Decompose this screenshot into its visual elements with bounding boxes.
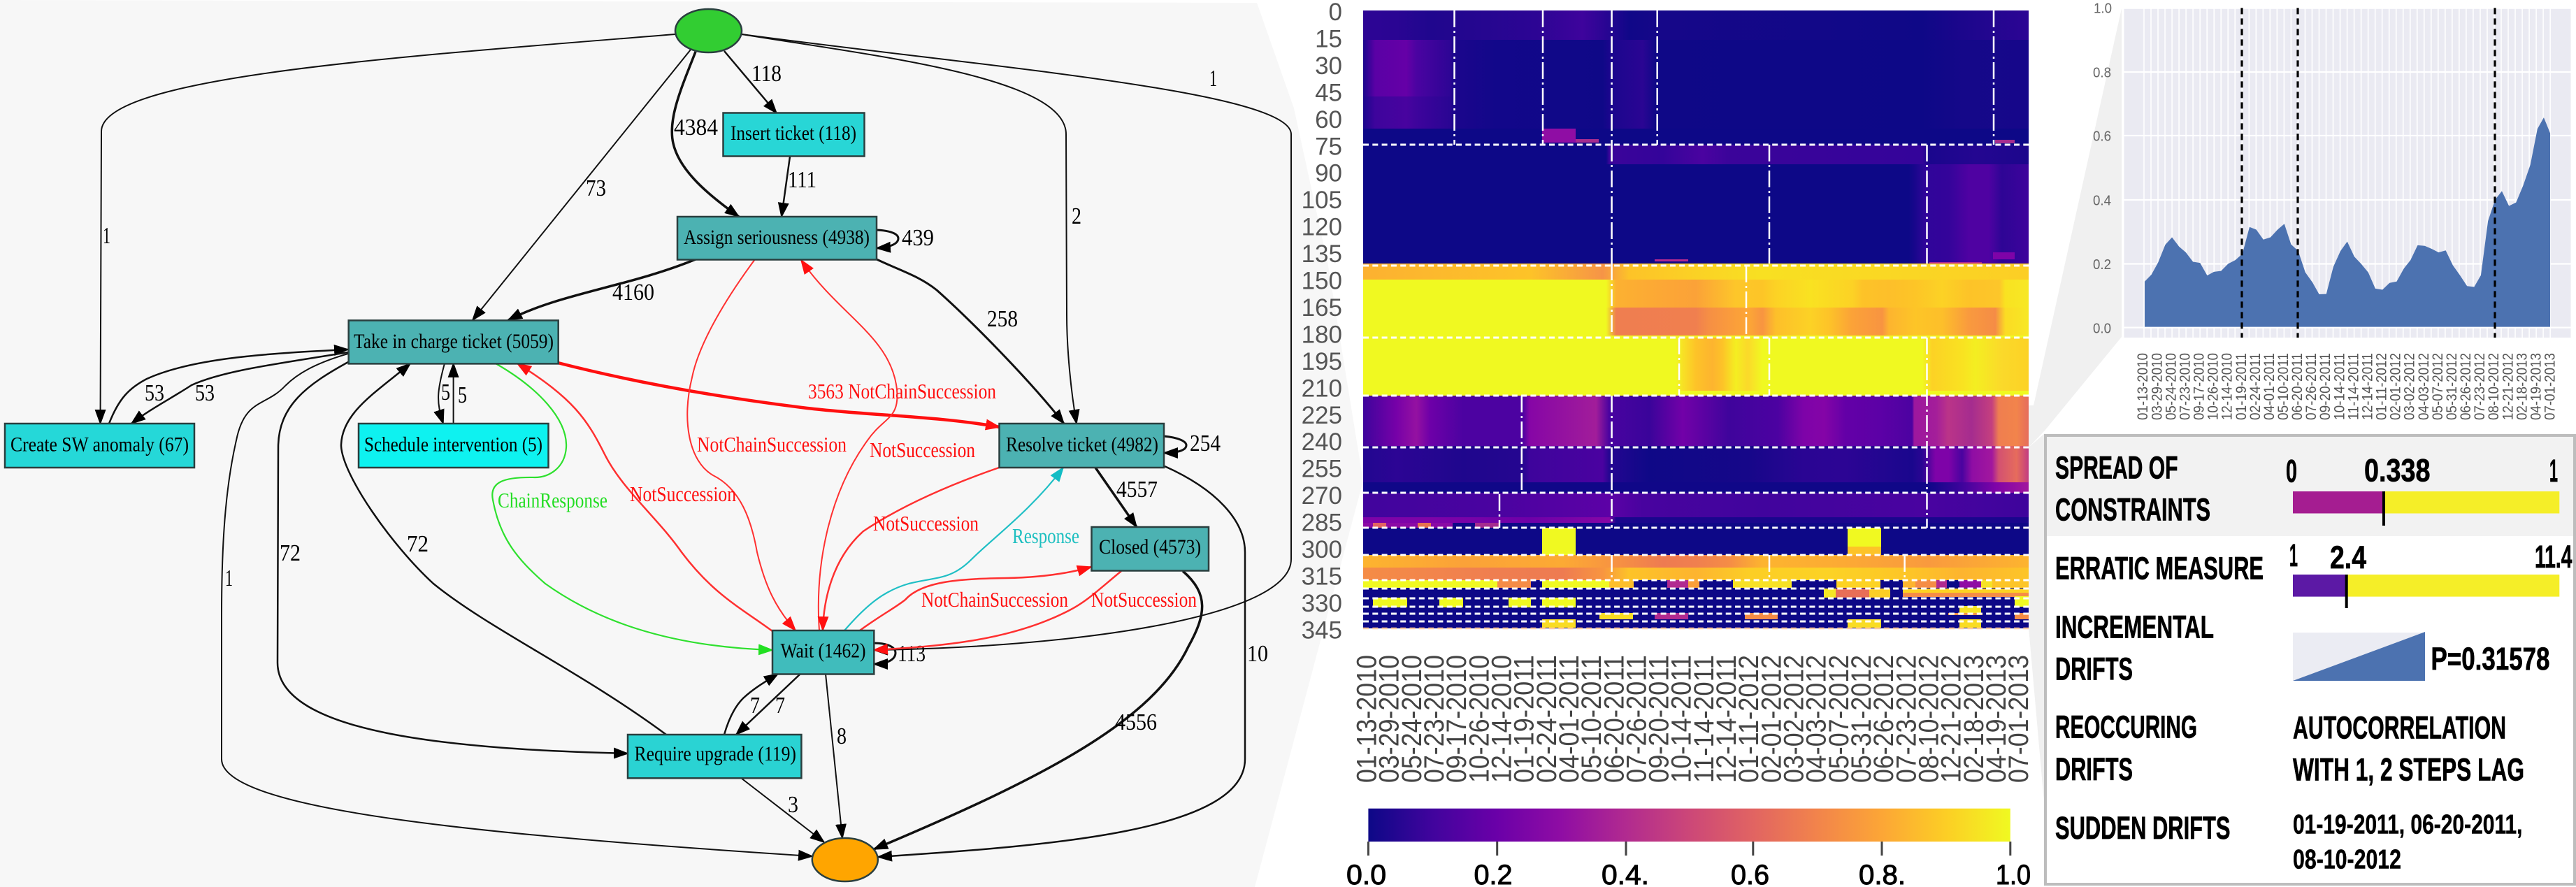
edge: create SW anomaly to take in charge: 53 xyxy=(145,380,164,406)
heatmap y axis labels xyxy=(1302,0,1342,644)
edge: require upgrade to end: 3 xyxy=(788,792,798,818)
edge: closed to end: 4556 xyxy=(1115,709,1157,735)
edge: create SW anomaly to take in charge xyxy=(109,349,348,424)
heatmap y axis labels: 45 xyxy=(1315,79,1342,106)
chart x axis date labels: 07-01-2013 xyxy=(2542,353,2559,420)
heatmap x axis date labels: 01-13-2010 xyxy=(1352,655,1383,783)
node: resolve ticket: Resolve ticket (4982) xyxy=(1006,433,1158,456)
edge: start to insert ticket xyxy=(724,51,782,113)
edge: assign seriousness self loop xyxy=(877,225,934,251)
chart x axis date labels: 02-01-2012 xyxy=(2388,353,2404,420)
red edge: assign seriousness to wait: NotChainSuccession xyxy=(697,432,847,456)
heatmap y axis labels: 120 xyxy=(1302,214,1342,241)
heatmap y axis labels: 210 xyxy=(1302,375,1342,402)
red edge: take in charge to resolve ticket xyxy=(558,363,1000,427)
zoom funnel background: process model xyxy=(0,0,1363,887)
metric: reoccuring drifts: REOCCURING xyxy=(2055,709,2197,745)
heatmap x axis date labels: 10-26-2010 xyxy=(1464,655,1495,783)
metric: erratic measure: ERRATIC MEASURE xyxy=(2055,550,2264,586)
edge: take in charge to schedule intervention: 5 xyxy=(441,380,450,405)
chart x axis date labels: 01-11-2012 xyxy=(2374,353,2390,420)
edge: start to wait: 1 xyxy=(1209,66,1217,92)
cyan edge: wait to resolve ticket: Response xyxy=(1012,524,1079,548)
heatmap y axis labels: 195 xyxy=(1302,348,1342,375)
panel: process model graph xyxy=(5,9,1291,881)
red edge: closed to wait xyxy=(874,571,1197,650)
green edge: take in charge to wait: ChainResponse xyxy=(498,488,607,512)
chart x axis date labels: 08-10-2012 xyxy=(2486,353,2502,420)
chart x axis date labels: 01-13-2010 xyxy=(2135,353,2151,420)
node: assign seriousness: Assign seriousness (4938) xyxy=(684,226,870,249)
cyan edge: wait to resolve ticket xyxy=(844,468,1079,630)
heatmap xyxy=(1363,10,2029,628)
heatmap x axis date labels: 08-10-2012 xyxy=(1914,655,1945,783)
edge: wait to end: 8 xyxy=(837,723,847,749)
chart x axis date labels: 05-24-2010 xyxy=(2163,353,2179,420)
metric: erratic measure xyxy=(2055,538,2573,608)
edge: insert ticket to assign seriousness: 111 xyxy=(788,167,816,193)
heatmap y axis labels: 345 xyxy=(1302,616,1342,644)
heatmap x axis date labels: 06-20-2011 xyxy=(1599,655,1629,783)
node: wait xyxy=(772,630,874,674)
chart y axis labels: 0.2 xyxy=(2093,257,2111,273)
chart x axis date labels: 04-19-2013 xyxy=(2528,353,2544,420)
area series xyxy=(2145,117,2550,327)
node: insert ticket: Insert ticket (118) xyxy=(731,122,856,145)
heatmap x axis date labels: 05-31-2012 xyxy=(1846,655,1877,783)
chart x axis date labels: 12-21-2012 xyxy=(2500,353,2516,420)
heatmap y axis labels: 270 xyxy=(1302,482,1342,510)
red edge: wait to closed: NotChainSuccession xyxy=(921,587,1068,612)
heatmap y axis labels: 330 xyxy=(1302,590,1342,617)
heatmap x axis date labels: 07-01-2013 xyxy=(2003,655,2034,783)
edge: wait self loop: 113 xyxy=(898,641,926,667)
heatmap y axis labels: 285 xyxy=(1302,510,1342,537)
heatmap x axis date labels: 04-01-2011 xyxy=(1554,655,1585,783)
edge: take in charge to require upgrade xyxy=(278,362,628,753)
metric: incremental drifts xyxy=(2055,610,2550,687)
edge: require upgrade to end xyxy=(741,778,824,842)
chart x axis date labels: 07-23-2012 xyxy=(2472,353,2488,420)
chart x axis date labels: 04-01-2011 xyxy=(2261,353,2278,420)
heatmap y axis labels: 225 xyxy=(1302,402,1342,429)
heatmap y axis labels: 135 xyxy=(1302,240,1342,268)
metric: sudden drifts xyxy=(2055,810,2522,874)
edge: resolve ticket self loop xyxy=(1164,431,1221,456)
chart x axis date labels: 02-24-2011 xyxy=(2247,353,2264,420)
edge: take in charge to end xyxy=(222,354,812,856)
node: take in charge ticket: Take in charge ticket (5059) xyxy=(354,330,554,353)
node: schedule intervention xyxy=(359,424,548,468)
panel: drift metrics xyxy=(2045,435,2575,884)
heatmap x axis date labels: 12-14-2010 xyxy=(1486,655,1517,783)
chart x axis date labels: 07-26-2011 xyxy=(2303,353,2319,420)
chart x axis date labels: 04-03-2012 xyxy=(2416,353,2432,420)
chart y axis labels: 1.0 xyxy=(2094,1,2112,16)
metric: spread of constraints: CONSTRAINTS xyxy=(2055,492,2210,527)
chart x axis date labels: 10-14-2011 xyxy=(2331,353,2347,420)
edge: start to resolve ticket xyxy=(742,34,1081,424)
metric: spread of constraints xyxy=(2055,449,2559,527)
edge: take in charge to schedule intervention xyxy=(438,363,450,424)
chart x axis date labels: 09-20-2011 xyxy=(2317,353,2333,420)
metric: reoccuring drifts: DRIFTS xyxy=(2055,751,2133,787)
red edge: resolve ticket to wait xyxy=(823,468,999,630)
heatmap x axis date labels: 02-01-2012 xyxy=(1756,655,1787,783)
highlighted row background xyxy=(2047,437,2573,536)
edge: resolve ticket to end xyxy=(878,466,1268,857)
metric: reoccuring drifts xyxy=(2055,709,2524,788)
chart x axis date labels: 07-23-2010 xyxy=(2177,353,2193,420)
red edge: wait to closed xyxy=(860,567,1091,630)
edge: closed to end xyxy=(874,571,1202,849)
heatmap x axis date labels: 09-20-2011 xyxy=(1644,655,1675,783)
heatmap x axis date labels: 01-11-2012 xyxy=(1734,655,1764,783)
panel frame xyxy=(2045,435,2575,884)
metric: spread of constraints: 1 xyxy=(2549,453,2558,489)
red edge: wait to assign seriousness xyxy=(801,260,975,630)
node: require upgrade xyxy=(628,735,801,778)
heatmap x axis date labels: 01-19-2011 xyxy=(1509,655,1540,783)
chart x axis date labels: 06-20-2011 xyxy=(2289,353,2305,420)
colorbar legend xyxy=(1346,809,2031,887)
edge: resolve ticket to closed: 4557 xyxy=(1116,477,1158,503)
node: closed xyxy=(1092,527,1209,570)
edge: start to wait xyxy=(742,34,1291,650)
node: create SW anomaly: Create SW anomaly (67) xyxy=(10,433,189,456)
heatmap y axis labels: 90 xyxy=(1315,160,1342,187)
edge: resolve ticket to closed xyxy=(1095,468,1158,527)
heatmap y axis labels: 240 xyxy=(1302,428,1342,456)
heatmap x axis date labels: 11-14-2011 xyxy=(1689,655,1720,783)
heatmap x axis date labels: 07-23-2010 xyxy=(1419,655,1450,783)
heatmap y axis labels: 15 xyxy=(1315,25,1342,53)
edge: require upgrade to take in charge: 72 xyxy=(407,531,429,557)
edge: assign seriousness self loop: 439 xyxy=(902,225,934,251)
heatmap x axis date labels: 07-26-2011 xyxy=(1621,655,1652,783)
heatmap y axis labels: 315 xyxy=(1302,563,1342,590)
heatmap x axis date labels: 02-24-2011 xyxy=(1532,655,1562,783)
chart x axis date labels xyxy=(2135,353,2559,420)
node: schedule intervention: Schedule intervention (5) xyxy=(364,433,542,456)
red edge: take in charge to resolve ticket: 3563 NotChainSuccession xyxy=(808,379,996,403)
chart y axis labels xyxy=(2093,1,2112,337)
chart y axis labels: 0.4 xyxy=(2093,193,2111,208)
metric: sudden drifts: SUDDEN DRIFTS xyxy=(2055,810,2230,846)
heatmap x axis date labels: 12-21-2012 xyxy=(1936,655,1967,783)
edge: require upgrade to take in charge xyxy=(341,363,666,735)
edge: schedule intervention to take in charge xyxy=(454,363,467,424)
edge: start to insert ticket: 118 xyxy=(751,61,782,87)
edge: take in charge to require upgrade: 72 xyxy=(280,540,301,566)
node: create SW anomaly xyxy=(5,424,194,468)
chart x axis date labels: 02-18-2013 xyxy=(2514,353,2530,420)
edge: assign seriousness to resolve ticket xyxy=(877,259,1064,424)
metric: spread of constraints: 0.338 xyxy=(2364,453,2430,488)
node: take in charge ticket xyxy=(349,320,559,363)
chart y axis labels: 0.6 xyxy=(2093,129,2111,145)
chart gridlines xyxy=(2124,8,2571,338)
heatmap y axis labels: 105 xyxy=(1302,187,1342,214)
heatmap x axis date labels: 09-17-2010 xyxy=(1441,655,1472,783)
chart x axis date labels: 09-17-2010 xyxy=(2191,353,2208,420)
heatmap x axis date labels: 04-19-2013 xyxy=(1981,655,2012,783)
edge: assign seriousness to take in charge xyxy=(508,259,696,320)
edge: resolve ticket to end: 10 xyxy=(1247,641,1268,667)
edge: wait to require upgrade: 7 xyxy=(775,693,785,719)
red edge: wait to take in charge: NotSuccession xyxy=(630,482,736,506)
edge: wait to require upgrade xyxy=(736,674,800,735)
edge: wait to end xyxy=(826,674,847,838)
metric: incremental drifts: DRIFTS xyxy=(2055,651,2133,687)
red edge: closed to wait: NotSuccession xyxy=(1091,587,1197,612)
edge: start to create SW anomaly xyxy=(101,34,675,424)
green edge: take in charge to wait xyxy=(492,363,772,650)
node: start xyxy=(675,9,742,52)
chart x axis date labels: 05-31-2012 xyxy=(2444,353,2460,420)
chart x axis date labels: 05-10-2011 xyxy=(2275,353,2291,420)
edge: assign seriousness to resolve ticket: 258 xyxy=(987,306,1018,332)
node: resolve ticket xyxy=(1000,424,1164,468)
heatmap y axis labels: 60 xyxy=(1315,106,1342,134)
chart plot background xyxy=(2124,8,2571,338)
edge: wait self loop xyxy=(874,641,926,667)
red edge: wait to assign seriousness: NotSuccession xyxy=(870,438,975,462)
heatmap y axis labels: 255 xyxy=(1302,456,1342,483)
edge: take in charge to create SW anomaly: 53 xyxy=(195,380,215,406)
heatmap x axis date labels: 05-24-2010 xyxy=(1397,655,1427,783)
chart x axis date labels: 06-26-2012 xyxy=(2458,353,2474,420)
red edge: resolve ticket to wait: NotSuccession xyxy=(873,511,979,535)
chart x axis date labels: 12-14-2011 xyxy=(2360,353,2375,420)
heatmap y axis labels: 180 xyxy=(1302,321,1342,348)
chart x axis date labels: 10-26-2010 xyxy=(2206,353,2222,420)
heatmap x axis date labels: 04-03-2012 xyxy=(1801,655,1832,783)
edge: assign seriousness to take in charge: 4160 xyxy=(612,280,654,305)
edge: schedule intervention to take in charge: 5 xyxy=(458,382,467,408)
heatmap x axis date labels: 05-07-2012 xyxy=(1824,655,1855,783)
edge: start to assign seriousness xyxy=(672,52,739,217)
metric: spread of constraints: 0 xyxy=(2286,453,2297,489)
red edge: wait to take in charge xyxy=(517,363,772,631)
chart x axis date labels: 03-02-2012 xyxy=(2402,353,2418,420)
chart x axis date labels: 03-29-2010 xyxy=(2149,353,2165,420)
edge: resolve ticket self loop: 254 xyxy=(1190,431,1221,456)
heatmap x axis date labels: 03-02-2012 xyxy=(1778,655,1809,783)
zoom funnel: heatmap to metrics panel xyxy=(2029,433,2045,810)
zoom funnel: heatmap to time series xyxy=(2029,8,2122,447)
heatmap y axis labels: 75 xyxy=(1315,133,1342,160)
area chart: time series with sudden drifts xyxy=(2093,1,2571,420)
metric: incremental drifts: INCREMENTAL xyxy=(2055,610,2214,644)
chart x axis date labels: 12-14-2010 xyxy=(2219,353,2236,420)
edge: take in charge to end: 1 xyxy=(225,565,233,591)
node: require upgrade: Require upgrade (119) xyxy=(635,742,796,765)
node: assign seriousness xyxy=(677,217,877,260)
edge: start to create SW anomaly: 1 xyxy=(103,223,110,249)
sudden drift markers xyxy=(2242,8,2495,338)
heatmap x axis date labels: 02-18-2013 xyxy=(1959,655,1989,783)
edge: start to resolve ticket: 2 xyxy=(1072,203,1081,229)
metric: sudden drifts: 08-10-2012 xyxy=(2293,844,2401,874)
edge: insert ticket to assign seriousness xyxy=(782,157,816,217)
red edge: assign seriousness to wait xyxy=(687,259,847,630)
heatmap x axis date labels: 05-10-2011 xyxy=(1576,655,1607,783)
metric: spread of constraints: SPREAD OF xyxy=(2055,449,2178,485)
chart x axis date labels: 01-19-2011 xyxy=(2233,353,2250,420)
edge: require upgrade to wait xyxy=(724,674,778,735)
node: insert ticket xyxy=(723,113,864,157)
node: closed: Closed (4573) xyxy=(1099,535,1201,558)
node: wait: Wait (1462) xyxy=(780,639,865,663)
heatmap y axis labels: 300 xyxy=(1302,536,1342,563)
chart x axis date labels: 05-07-2012 xyxy=(2430,353,2446,420)
chart y axis labels: 0.8 xyxy=(2093,66,2111,81)
heatmap x axis date labels: 07-23-2012 xyxy=(1891,655,1922,783)
metric: erratic measure: 1 xyxy=(2289,538,2298,573)
edge: start to assign seriousness: 4384 xyxy=(674,115,718,140)
heatmap x axis date labels: 03-29-2010 xyxy=(1374,655,1405,783)
heatmap x axis date labels: 12-14-2011 xyxy=(1711,655,1742,783)
edge: take in charge to create SW anomaly xyxy=(131,352,348,424)
chart y axis labels: 0.0 xyxy=(2093,322,2111,337)
edge: start to take in charge: 73 xyxy=(586,175,606,201)
heatmap x axis date labels: 06-26-2012 xyxy=(1869,655,1899,783)
edge: require upgrade to wait: 7 xyxy=(750,693,760,719)
chart x axis date labels: 11-14-2011 xyxy=(2345,353,2361,420)
node: end xyxy=(812,838,878,881)
heatmap y axis labels: 165 xyxy=(1302,294,1342,322)
edge: start to take in charge xyxy=(473,50,691,320)
heatmap x axis date labels: 10-14-2011 xyxy=(1667,655,1697,783)
heatmap x axis date labels xyxy=(1352,655,2034,783)
metric: erratic measure: 2.4 xyxy=(2330,540,2366,575)
heatmap y axis labels: 30 xyxy=(1315,52,1342,80)
heatmap y axis labels: 150 xyxy=(1302,267,1342,295)
